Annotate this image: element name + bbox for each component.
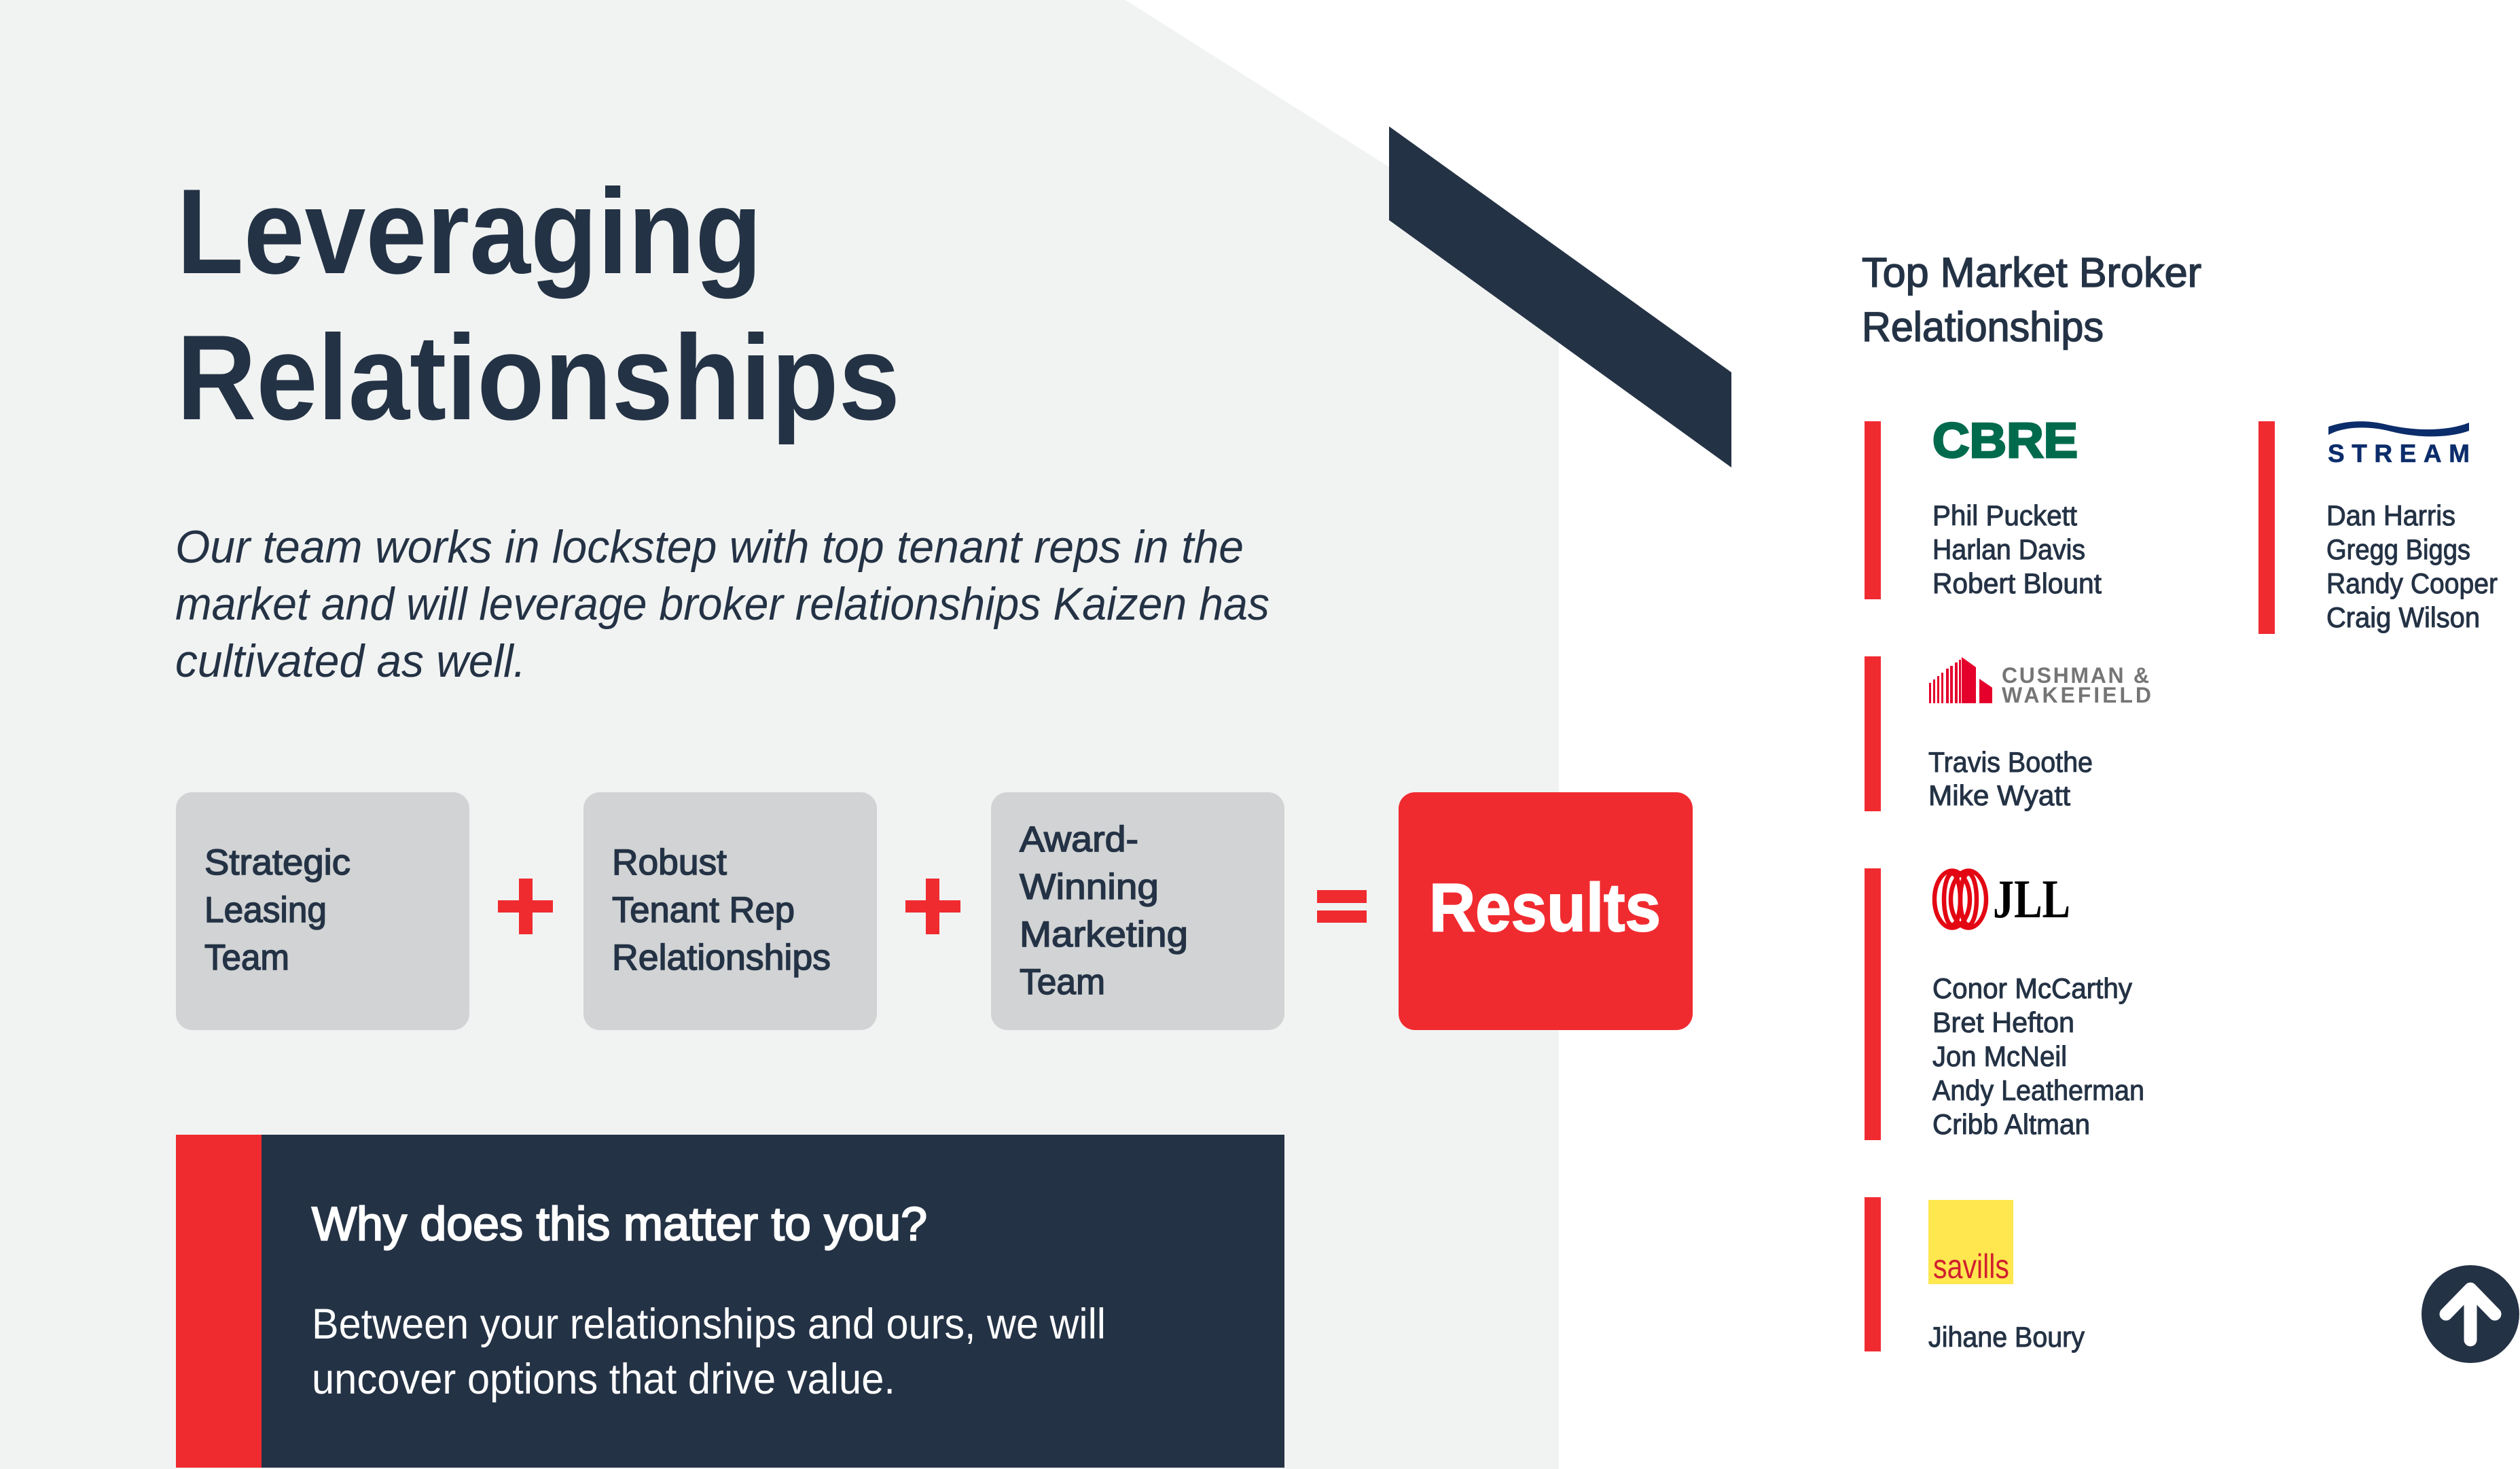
broker: CBRE: Robert Blount [1932, 567, 2102, 599]
equation box: strategic leasing team: Strategic [204, 843, 350, 883]
broker: Stream: Dan Harris [2326, 499, 2455, 531]
equation box: robust tenant rep relationships: Relationships [612, 938, 831, 978]
logo: Cushman & Wakefield [1929, 657, 2151, 707]
broker: CBRE [1865, 414, 2102, 599]
broker: Cushman & Wakefield [1865, 656, 2151, 811]
equation box: award-winning marketing team [991, 792, 1284, 1030]
logo: JLL: JLL [1993, 870, 2070, 930]
intro paragraph: cultivated as well. [175, 635, 526, 687]
broker: Stream: Gregg Biggs [2326, 533, 2470, 565]
equation box: award-winning marketing team: Team [1020, 962, 1105, 1002]
equation box: robust tenant rep relationships: Robust [612, 843, 727, 883]
broker: CBRE: Phil Puckett [1932, 499, 2077, 531]
broker: JLL: Andy Leatherman [1932, 1074, 2144, 1106]
equation box: strategic leasing team: Leasing [204, 890, 327, 930]
logo: Cushman & Wakefield: CUSHMAN & [2002, 663, 2149, 688]
heading: top market broker relationships: Relationships [1862, 304, 2104, 350]
broker: JLL: Conor McCarthy [1932, 972, 2132, 1004]
callout: why does this matter: Between your relationships and ours, we will [312, 1300, 1106, 1348]
logo: JLL [1934, 870, 2070, 930]
title: Relationships [177, 310, 900, 445]
plus sign [498, 879, 553, 934]
broker: JLL: Bret Hefton [1932, 1006, 2074, 1038]
logo: Savills [1928, 1200, 2013, 1286]
logo: Savills: savills [1933, 1247, 2009, 1286]
equals sign [1317, 890, 1367, 923]
heading: top market broker relationships: Top Market Broker [1862, 249, 2201, 296]
logo: Cushman & Wakefield: WAKEFIELD [2002, 683, 2151, 707]
intro paragraph [175, 521, 1270, 687]
plus sign [905, 879, 960, 934]
logo: Stream [2328, 421, 2470, 467]
equation box: strategic leasing team: Team [204, 938, 289, 978]
heading: top market broker relationships [1862, 249, 2201, 350]
results box [1399, 792, 1693, 1030]
callout: why does this matter [176, 1135, 1284, 1468]
title: Leveraging [177, 164, 762, 299]
broker: Stream: Randy Cooper [2326, 567, 2498, 599]
equation box: robust tenant rep relationships: Tenant Rep [612, 890, 795, 930]
broker: Stream: Craig Wilson [2326, 601, 2480, 633]
equation box: robust tenant rep relationships [583, 792, 877, 1030]
title [177, 164, 900, 445]
broker: Savills [1865, 1197, 2085, 1353]
equation box: strategic leasing team [176, 792, 469, 1030]
equation box: award-winning marketing team: Award- [1020, 819, 1138, 860]
broker: JLL: Cribb Altman [1932, 1108, 2090, 1140]
background panel: light grey house shape [0, 0, 1559, 1469]
broker: Stream [2258, 421, 2498, 634]
callout: why does this matter: Why does this matter to you? [312, 1197, 927, 1250]
intro paragraph: Our team works in lockstep with top tenant reps in the [175, 521, 1244, 573]
broker: Cushman & Wakefield: Mike Wyatt [1928, 779, 2070, 811]
logo: Stream: STREAM [2328, 440, 2470, 467]
broker: Savills: Jihane Boury [1928, 1321, 2085, 1353]
icon: back-to-top arrow [2422, 1265, 2519, 1363]
results box: Results [1429, 870, 1661, 946]
intro paragraph: market and will leverage broker relationships Kaizen has [175, 578, 1270, 630]
broker: JLL: Jon McNeil [1932, 1040, 2067, 1072]
callout: why does this matter: uncover options that drive value. [312, 1356, 895, 1403]
broker: Cushman & Wakefield: Travis Boothe [1928, 746, 2093, 778]
broker: CBRE: Harlan Davis [1932, 533, 2085, 565]
roof band: navy diagonal [1389, 126, 1731, 467]
equation box: award-winning marketing team: Winning [1020, 867, 1159, 907]
logo: CBRE: CBRE [1932, 414, 2078, 468]
equation box: award-winning marketing team: Marketing [1020, 915, 1188, 955]
broker: JLL [1865, 868, 2144, 1140]
